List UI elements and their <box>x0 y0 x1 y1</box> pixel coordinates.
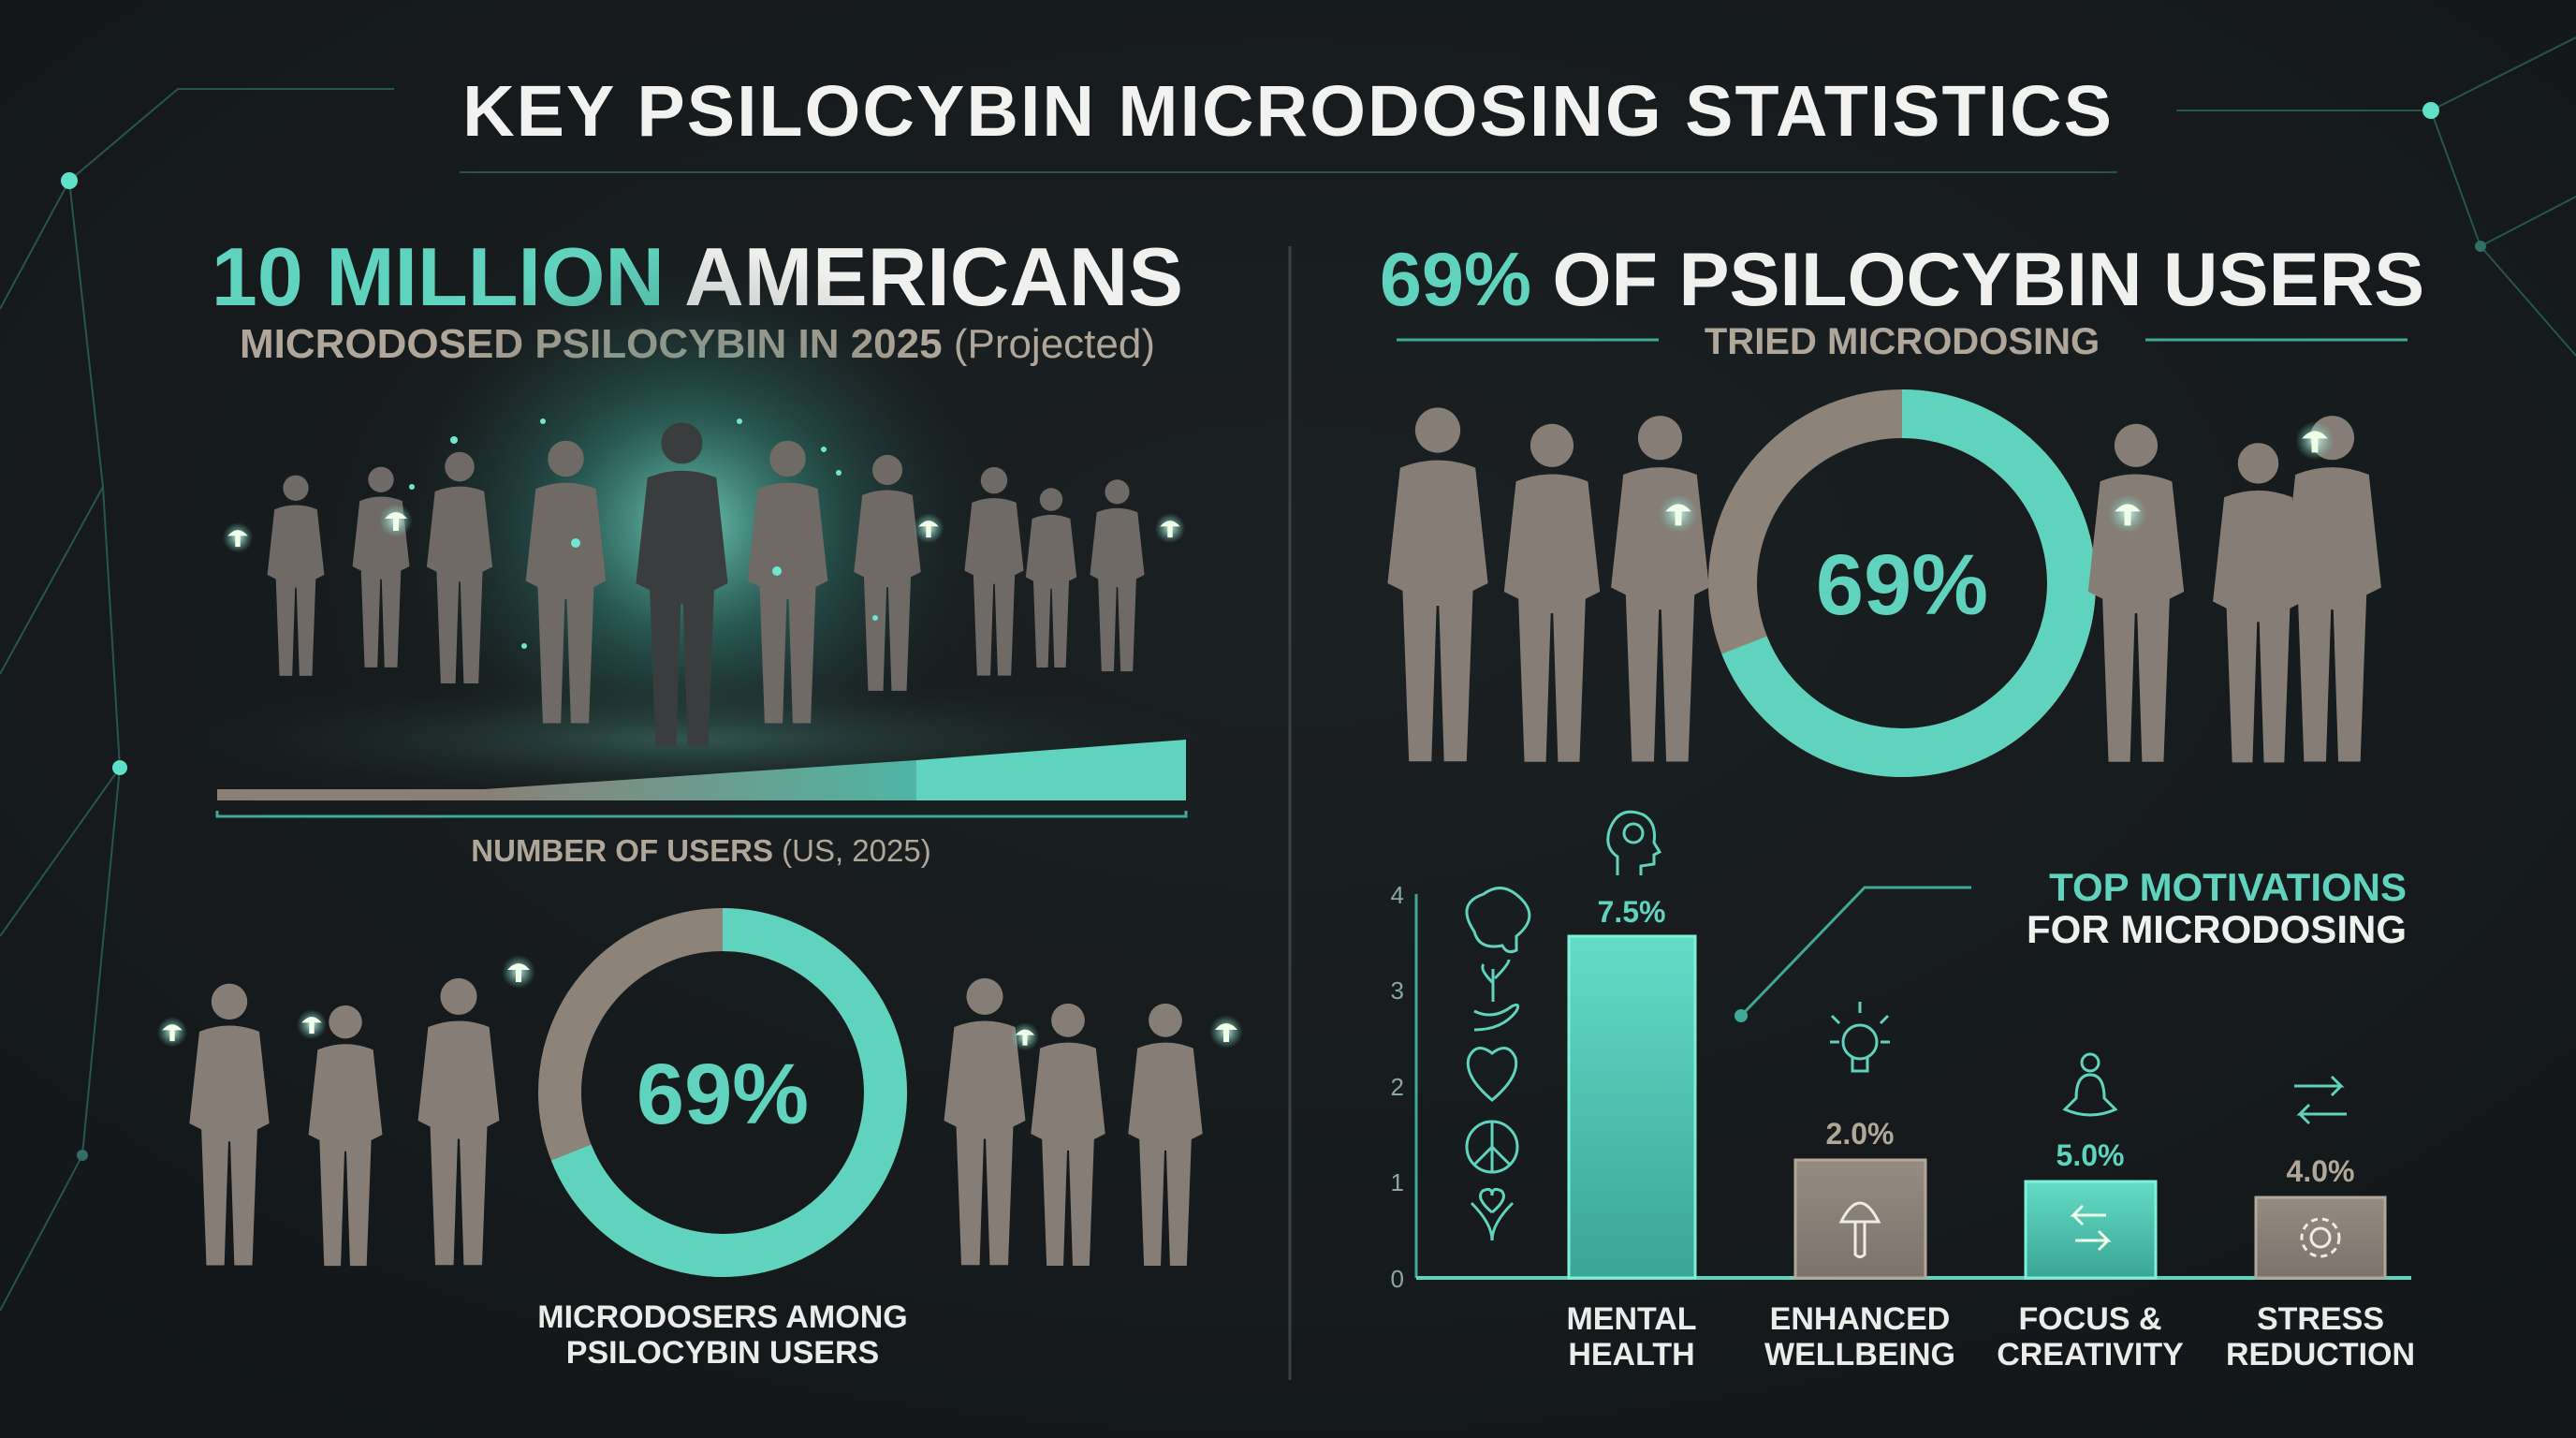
left heading: MICRODOSED PSILOCYBIN IN 2025 (Projected) <box>240 321 1155 367</box>
category labels: ENHANCED <box>1770 1301 1950 1337</box>
label: number of users: NUMBER OF USERS (US, 2025) <box>471 833 931 868</box>
bar: focus & creativity <box>2026 1054 2156 1278</box>
donut: tried microdosing <box>1733 414 2071 753</box>
donut: microdosers among users <box>560 930 886 1255</box>
bar: stress reduction: 4.0% <box>2287 1154 2354 1188</box>
people around left donut <box>157 955 1243 1266</box>
category labels: STRESS <box>2257 1301 2384 1337</box>
divider <box>1288 246 1292 1380</box>
y axis: 0 <box>1391 1265 1404 1293</box>
bar: mental health <box>1569 812 1695 1278</box>
y axis <box>1391 881 1416 1293</box>
donut: microdosers among users: 69% <box>637 1047 809 1142</box>
category labels: FOCUS & <box>2018 1301 2162 1337</box>
title: KEY PSILOCYBIN MICRODOSING STATISTICS <box>462 71 2114 152</box>
callout: top motivations: FOR MICRODOSING <box>2027 907 2407 951</box>
y axis: 3 <box>1391 976 1404 1005</box>
icon column <box>1467 888 1530 1240</box>
callout: top motivations <box>1734 865 2407 1022</box>
caption: microdosers among psilocybin users: MICRODOSERS AMONG <box>537 1299 908 1335</box>
category labels <box>1566 1301 2415 1372</box>
bar chart: top motivations <box>1391 812 2415 1372</box>
baseline <box>1416 1276 2411 1280</box>
category labels: WELLBEING <box>1764 1337 1955 1372</box>
right heading <box>1380 238 2424 362</box>
left heading: 10 MILLION AMERICANS <box>212 230 1183 323</box>
left heading <box>212 230 1183 367</box>
donut: tried microdosing: 69% <box>1816 537 1988 633</box>
y axis: 4 <box>1391 881 1404 909</box>
right heading: 69% OF PSILOCYBIN USERS <box>1380 238 2424 322</box>
illustration: crowd <box>166 243 1214 805</box>
y axis: 1 <box>1391 1168 1404 1196</box>
category labels: MENTAL <box>1566 1301 1697 1337</box>
callout: top motivations: TOP MOTIVATIONS <box>2049 865 2407 909</box>
bar: number of users <box>217 740 1186 816</box>
caption: microdosers among psilocybin users: PSILOCYBIN USERS <box>566 1335 879 1371</box>
people around right donut <box>1387 407 2381 762</box>
bar: enhanced wellbeing: 2.0% <box>1826 1117 1894 1151</box>
bar: mental health: 7.5% <box>1598 895 1665 929</box>
category labels: REDUCTION <box>2226 1337 2415 1372</box>
y axis: 2 <box>1391 1073 1404 1101</box>
bar: stress reduction <box>2256 1077 2385 1278</box>
bar: focus & creativity: 5.0% <box>2056 1138 2124 1172</box>
right heading: TRIED MICRODOSING <box>1705 321 2100 362</box>
category labels: HEALTH <box>1568 1337 1695 1372</box>
bar: enhanced wellbeing <box>1795 1002 1925 1278</box>
category labels: CREATIVITY <box>1997 1337 2184 1372</box>
